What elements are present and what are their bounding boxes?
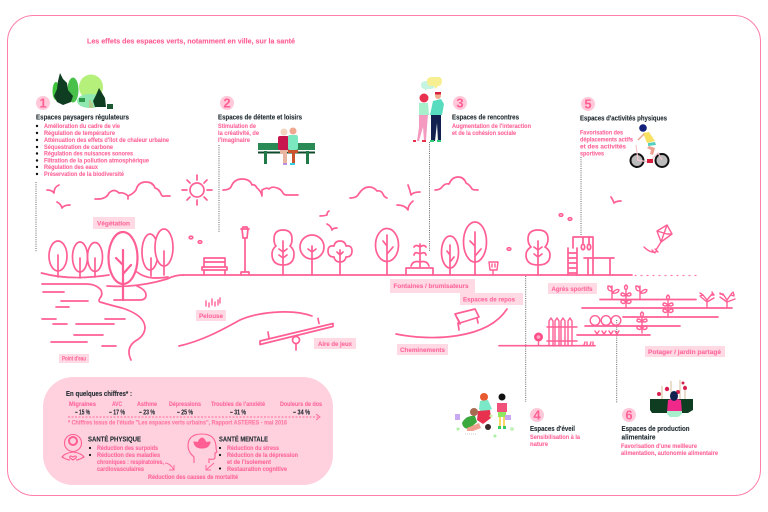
description: et des activités bbox=[580, 144, 627, 150]
labels on scene bbox=[59, 217, 725, 363]
santé mentale: Réduction du stress bbox=[227, 446, 280, 452]
label: point d'eau: Point d'eau bbox=[62, 356, 86, 362]
label: aire de jeux: Aire de jeux bbox=[318, 341, 352, 348]
number 5: 5 bbox=[584, 96, 592, 112]
heading: En quelques chiffres* : bbox=[66, 391, 132, 398]
statistics: AVC bbox=[112, 402, 123, 408]
list bbox=[36, 124, 170, 178]
number 6: 6 bbox=[625, 408, 633, 422]
statistics: – 31 % bbox=[230, 410, 247, 416]
statistics: – 25 % bbox=[177, 410, 194, 416]
label: végétation bbox=[93, 217, 135, 229]
arrows to mortality bbox=[165, 463, 214, 470]
panel: en quelques chiffres bbox=[43, 377, 333, 485]
title: Les effets des espaces verts, notamment en ville, sur la santé bbox=[87, 36, 295, 46]
heading: Espaces de rencontres bbox=[452, 114, 519, 122]
list: Régulation de température bbox=[44, 131, 116, 137]
icon: litter bin bbox=[489, 262, 498, 275]
number 4: 4 bbox=[533, 408, 541, 422]
grass tuft bbox=[206, 298, 220, 307]
trees group left bbox=[49, 229, 173, 300]
statistics: Dépressions bbox=[169, 402, 202, 408]
label: fontaines bbox=[390, 279, 475, 293]
description: alimentation, autonomie alimentaire bbox=[621, 451, 719, 457]
description: et de la cohésion sociale bbox=[452, 131, 517, 137]
icon: fence bbox=[547, 318, 577, 346]
label: agrès sportifs: Agrès sportifs bbox=[552, 286, 593, 293]
santé physique: SANTÉ PHYSIQUE bbox=[88, 434, 141, 444]
statistics bbox=[69, 402, 323, 416]
park scene: ground and water bbox=[42, 272, 632, 360]
label: cheminements bbox=[397, 344, 448, 355]
number 2: 2 bbox=[223, 96, 231, 110]
icon: seniors on bench bbox=[258, 128, 315, 165]
icon: mental health head bbox=[188, 434, 217, 463]
icon: two people talking bbox=[413, 77, 444, 142]
list: Filtration de la pollution atmosphérique bbox=[44, 158, 150, 164]
label: espaces de repos: Espaces de repos bbox=[463, 296, 515, 304]
label: cheminements: Cheminements bbox=[400, 347, 445, 354]
description: déplacements actifs bbox=[580, 138, 634, 144]
description: nature bbox=[530, 442, 549, 448]
icon: physical health bbox=[62, 434, 84, 460]
santé physique: Réduction des surpoids bbox=[97, 446, 159, 452]
park bench and lamp bbox=[202, 227, 249, 275]
santé mentale: Réduction de la dépression bbox=[227, 453, 298, 459]
vegetable garden bbox=[499, 300, 732, 346]
panel: 5 espaces d'activités physiques bbox=[580, 96, 668, 167]
santé physique bbox=[88, 434, 164, 473]
santé mentale: SANTÉ MENTALE bbox=[219, 434, 268, 444]
description: Sensibilisation à la bbox=[530, 435, 581, 441]
statistics: – 23 % bbox=[139, 410, 156, 416]
number 1: 1 bbox=[39, 96, 47, 110]
heading: Espaces paysagers régulateurs bbox=[36, 114, 129, 122]
list: Régulation des nuisances sonores bbox=[44, 152, 134, 158]
clouds bbox=[95, 177, 478, 199]
statistics: Douleurs de dos bbox=[280, 402, 323, 408]
panel: 1 espaces paysagers régulateurs bbox=[36, 73, 170, 178]
description bbox=[452, 124, 531, 137]
statistics: Migraines bbox=[69, 402, 97, 408]
description bbox=[218, 124, 260, 144]
label: végétation: Végétation bbox=[97, 220, 130, 228]
number 3: 3 bbox=[456, 96, 464, 110]
sky: clouds, sun and birds bbox=[47, 175, 621, 250]
statistics: Troubles de l'anxiété bbox=[211, 402, 266, 408]
label: agrès sportifs bbox=[548, 283, 597, 294]
label: aire de jeux bbox=[314, 338, 356, 349]
icon: trees bbox=[52, 73, 113, 109]
description: Augmentation de l'interaction bbox=[452, 124, 531, 130]
list: Amélioration du cadre de vie bbox=[44, 124, 121, 130]
statistics: – 17 % bbox=[109, 410, 126, 416]
dotted leader lines bbox=[36, 142, 617, 403]
icon: garden plants bbox=[584, 285, 735, 345]
statistics: – 34 % bbox=[293, 410, 311, 416]
label: pelouse bbox=[196, 310, 226, 321]
santé physique: cardiovasculaires bbox=[97, 467, 145, 473]
panel: 6 espaces de production alimentaire bbox=[621, 380, 719, 457]
panel: 3 espaces de rencontres bbox=[413, 77, 531, 142]
dotted ground bbox=[635, 274, 700, 276]
heading bbox=[622, 426, 690, 442]
description bbox=[580, 130, 634, 158]
icon: sports equipment bbox=[568, 237, 614, 275]
statistics: Asthme bbox=[137, 402, 158, 408]
heading: Espaces de production bbox=[622, 426, 690, 433]
heading: Espaces d'activités physiques bbox=[580, 116, 667, 122]
birds bbox=[47, 185, 621, 250]
seesaw and curved path bbox=[179, 312, 333, 350]
label: potager: Potager / jardin partagé bbox=[648, 349, 721, 356]
description: Stimulation de bbox=[218, 124, 257, 130]
santé mentale: et de l'isolement bbox=[227, 460, 271, 466]
santé physique: chroniques : respiratoires, bbox=[97, 460, 164, 466]
description bbox=[621, 444, 719, 457]
footnote: * Chiffres issus de l'étude "Les espaces verts urbains", Rapport ASTERES - mai 2016 bbox=[68, 420, 288, 426]
santé mentale bbox=[219, 434, 298, 473]
icon: fountain bbox=[406, 244, 433, 275]
description: la créativité, de bbox=[218, 131, 260, 137]
list: Régulation des eaux bbox=[44, 165, 99, 171]
arrow: dashed bbox=[68, 414, 320, 420]
icon: gardener bbox=[650, 380, 693, 417]
description: l'imaginaire bbox=[218, 138, 251, 144]
icon: children in nature bbox=[455, 393, 514, 438]
description: sportives bbox=[580, 152, 605, 158]
icon: kite bbox=[644, 225, 672, 253]
label: potager bbox=[645, 346, 725, 357]
label: point d'eau bbox=[59, 354, 89, 363]
label: pelouse: Pelouse bbox=[199, 313, 223, 320]
heading: alimentaire bbox=[622, 434, 656, 442]
label: fontaines: Fontaines / brumisateurs bbox=[394, 283, 469, 290]
icon: flower bbox=[534, 332, 543, 346]
santé mentale: Restauration cognitive bbox=[227, 467, 288, 473]
panel: 4 espaces d'éveil bbox=[455, 393, 581, 448]
list: Préservation de la biodiversité bbox=[44, 172, 125, 178]
path and rest bench bbox=[396, 309, 507, 338]
label: espaces de repos bbox=[460, 293, 523, 305]
description: Favorisation des bbox=[580, 130, 624, 136]
icon: sun bbox=[182, 175, 212, 205]
description: Favorisation d'une meilleure bbox=[621, 444, 698, 450]
trees group centre bbox=[272, 222, 550, 275]
panel: 2 espaces de détente et loisirs bbox=[218, 96, 315, 165]
statistics: – 15 % bbox=[75, 410, 91, 416]
santé physique: Réduction des maladies bbox=[97, 453, 161, 459]
list: Atténuation des effets d'îlot de chaleur urbaine bbox=[44, 138, 170, 144]
list: Séquestration de carbone bbox=[44, 145, 114, 151]
icon: child on bicycle bbox=[630, 124, 668, 167]
heading: Espaces de détente et loisirs bbox=[218, 114, 302, 122]
mortality text: Réduction des causes de mortalité bbox=[148, 475, 239, 481]
heading: Espaces d'éveil bbox=[530, 426, 575, 433]
description bbox=[530, 435, 581, 448]
